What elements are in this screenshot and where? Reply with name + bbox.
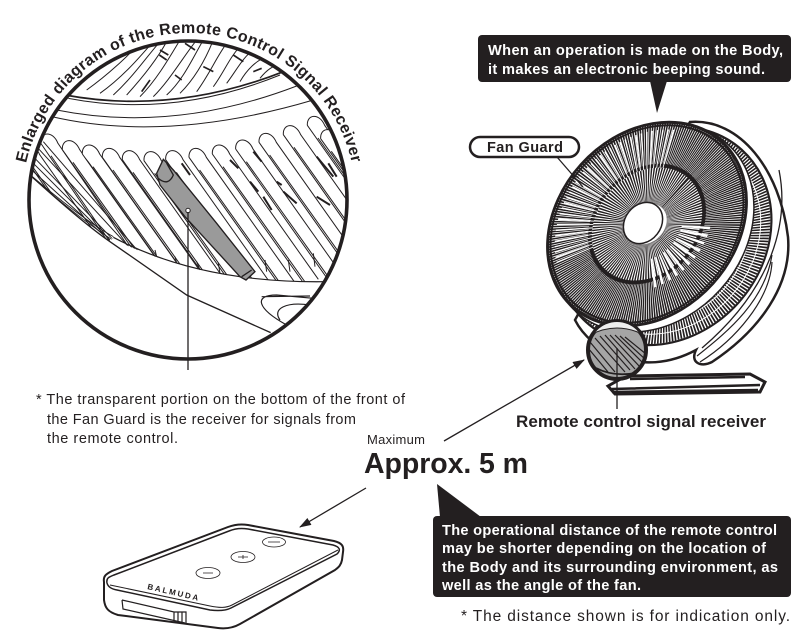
remote control illustration: [104, 524, 343, 628]
callout: operational distance: the Body and its surrounding environment, as: [442, 560, 778, 576]
fan centre hole: [615, 195, 671, 251]
note: transparent portion: * The transparent portion on the bottom of the front of: [36, 392, 406, 408]
remote buttons: [196, 537, 286, 578]
distance value: Approx. 5 m: [364, 448, 528, 480]
remote brand: BALMUDA: [147, 582, 199, 603]
callout: operational distance: The operational distance of the remote control: [442, 523, 777, 539]
fan base: [608, 374, 765, 394]
callout: operational distance: [433, 484, 791, 597]
leader line from receiver window: [186, 208, 190, 370]
fan arm: [697, 255, 772, 362]
ribs: [34, 116, 346, 282]
note: transparent portion: [36, 392, 406, 447]
fan illustration: [546, 120, 790, 409]
callout: beeping sound: it makes an electronic beeping sound.: [488, 62, 765, 78]
arrow: signal to receiver: [444, 360, 584, 441]
receiver leader: [616, 348, 618, 409]
callout: beeping sound: [478, 35, 791, 113]
note: transparent portion: the remote control.: [47, 431, 178, 447]
fan guard: [507, 82, 787, 366]
label: fan guard: Fan Guard: [487, 140, 563, 156]
dotted body band: [512, 83, 809, 389]
callout: operational distance: well as the angle of the fan.: [441, 578, 641, 594]
panel: enlarged diagram circle: [27, 39, 349, 361]
label: fan guard: [470, 137, 583, 187]
fan guard white rim: [508, 82, 796, 374]
callout: beeping sound: When an operation is made on the Body,: [488, 43, 783, 59]
heading: curved diagram title: Enlarged diagram of the Remote Control Signal Receiver: [16, 24, 360, 162]
receiver window: [157, 159, 255, 280]
footnote: * The distance shown is for indication only.: [461, 608, 790, 625]
fan back shell: [575, 122, 788, 364]
note: transparent portion: the Fan Guard is the receiver for signals from: [47, 412, 356, 428]
label: remote control signal receiver: Remote control signal receiver: [516, 412, 766, 431]
callout: operational distance: may be shorter depending on the location of: [442, 541, 766, 557]
arrow: signal from remote: [300, 488, 366, 527]
magnified receiver spot: [588, 318, 646, 379]
lower body: [48, 192, 186, 297]
label: maximum: Maximum: [367, 432, 425, 447]
